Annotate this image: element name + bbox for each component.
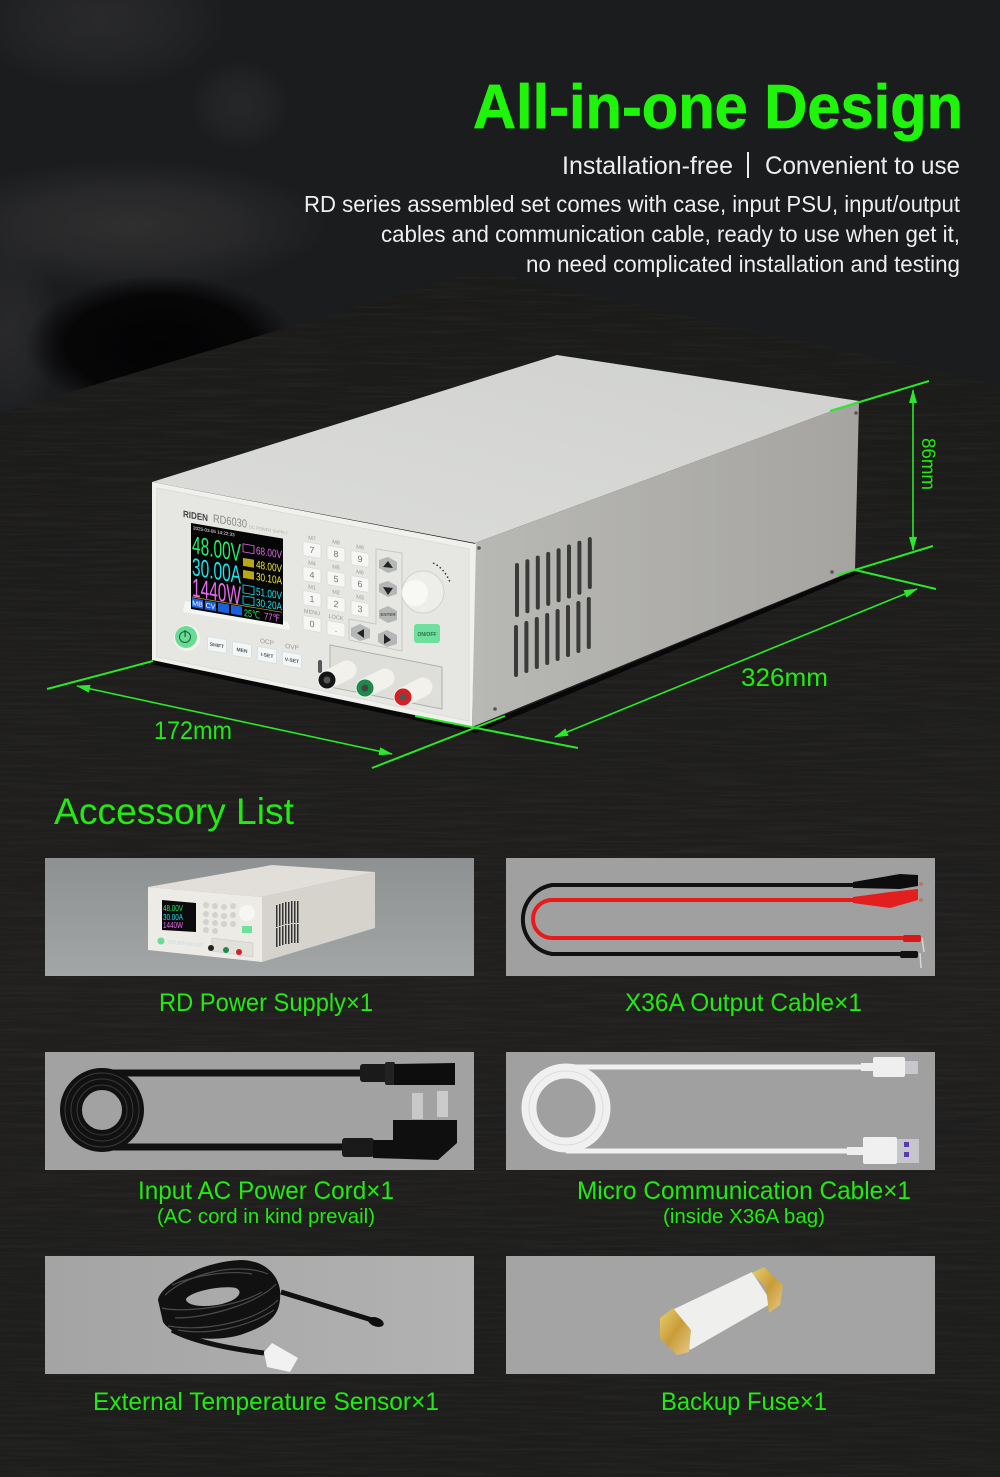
mini device (148, 865, 375, 962)
brand text (183, 508, 288, 538)
subtitle (562, 152, 960, 180)
keypad: 9 (357, 554, 363, 564)
LCD screen: 25℃ (244, 608, 260, 622)
on/off button: ON/OFF (418, 632, 436, 638)
white cable (529, 1067, 862, 1151)
brand text: RIDEN (183, 509, 208, 524)
keypad (303, 534, 369, 638)
function buttons (208, 636, 302, 669)
fuse caps (660, 1267, 783, 1355)
side screws (477, 411, 858, 711)
contact shadow (150, 570, 860, 733)
panel: external temperature sensor (45, 1256, 474, 1374)
fuse body (672, 1272, 772, 1350)
label: micro communication cable: Micro Communication Cable×1 (577, 1177, 911, 1205)
mini device: 1440W (163, 921, 183, 930)
description text (304, 191, 961, 277)
keypad: 4 (309, 570, 315, 580)
keypad: 8 (333, 549, 339, 559)
brand text: DC POWER SUPPLY (249, 524, 288, 536)
keypad: 3 (357, 604, 363, 614)
LCD screen: 2025-03-05 14:22:33 (193, 525, 235, 537)
LCD screen: 48.00V (256, 559, 282, 576)
label: external temperature sensor: External Temperature Sensor×1 (93, 1388, 439, 1416)
panel: micro communication cable (506, 1052, 935, 1170)
label: input AC power cord (138, 1177, 394, 1228)
white connector (264, 1343, 298, 1372)
USB-A connector (847, 1137, 919, 1164)
subtitle: Convenient to use (765, 152, 960, 180)
panel: X36A output cable (506, 858, 935, 976)
sensor probe tip (367, 1315, 385, 1329)
label: X36A output cable: X36A Output Cable×1 (625, 989, 862, 1017)
LCD screen: 30.20A (256, 597, 282, 614)
label: micro communication cable (577, 1177, 911, 1228)
output terminals (318, 645, 442, 709)
function buttons: OCP (260, 638, 275, 647)
keypad: 1 (309, 594, 315, 604)
product: RD6030 power supply (150, 355, 860, 733)
subtitle: Installation-free (562, 152, 733, 180)
dimension: 326mm depth (415, 570, 936, 748)
keypad: M2 (332, 589, 340, 597)
function buttons: I-SET (261, 652, 274, 660)
keypad: M6 (356, 569, 364, 577)
description text: cables and communication cable, ready to use when get it, (381, 221, 960, 247)
panel: backup fuse (506, 1256, 935, 1374)
label: input AC power cord: Input AC Power Cord×1 (138, 1177, 394, 1205)
dimension: 86mm height (830, 381, 938, 575)
panel: RD power supply (45, 858, 474, 976)
LCD screen: 48.00V (192, 531, 241, 567)
label: micro communication cable: (inside X36A bag) (663, 1205, 825, 1228)
function buttons: MEN (236, 647, 248, 655)
sensor cable coil (158, 1260, 280, 1339)
heading: accessory list: Accessory List (54, 791, 295, 832)
description text: no need complicated installation and testing (526, 251, 960, 277)
title: All-in-one Design (473, 73, 963, 142)
dimension: 172mm width: 172mm (154, 717, 232, 745)
side face (472, 401, 859, 727)
LCD screen: 77℉ (264, 611, 280, 625)
LCD screen: MB (192, 600, 203, 609)
panel: input AC power cord (45, 1052, 474, 1170)
keypad: 0 (309, 619, 315, 629)
function buttons: SHIFT (210, 642, 225, 650)
micro connector (861, 1057, 918, 1077)
label: backup fuse: Backup Fuse×1 (661, 1388, 827, 1416)
brand text: RD6030 (213, 513, 247, 531)
function buttons: OVP (285, 643, 299, 652)
keypad: M9 (356, 544, 364, 552)
mini device: 48.00V (163, 904, 184, 913)
front face (152, 482, 476, 727)
keypad: M8 (332, 539, 340, 547)
IEC connector (360, 1062, 455, 1085)
arrow key panel: ENTER (380, 612, 396, 617)
dimension: 86mm height: 86mm (917, 438, 938, 490)
function buttons: V-SET (285, 657, 300, 665)
LCD screen: 30.00A (192, 553, 241, 589)
keypad: . (335, 624, 337, 634)
mains plug (342, 1091, 457, 1160)
keypad: M5 (332, 564, 340, 572)
LCD screen: CV (206, 603, 216, 611)
black clip (853, 874, 923, 889)
keypad: 5 (333, 574, 339, 584)
LCD screen: 30.10A (256, 571, 282, 588)
keypad: 2 (333, 599, 339, 609)
keypad: M4 (308, 560, 316, 568)
label: input AC power cord: (AC cord in kind prevail) (157, 1205, 375, 1228)
keypad: M3 (356, 594, 364, 602)
dimension: 326mm depth: 326mm (741, 664, 828, 692)
LCD screen: 51.00V (256, 586, 282, 603)
on/off button (414, 624, 440, 643)
side vents (516, 539, 590, 675)
keypad: M7 (308, 535, 316, 543)
keypad: LOCK (329, 614, 344, 622)
arrow key panel (349, 549, 402, 651)
label: RD power supply: RD Power Supply×1 (159, 989, 373, 1017)
keypad: MENU (304, 609, 320, 617)
lower wire and probe (172, 1292, 372, 1353)
background: blurred room (0, 0, 1000, 430)
power button (174, 625, 200, 651)
LCD screen: 68.00V (256, 545, 282, 562)
LCD screen: 1440W (192, 572, 241, 610)
cord (65, 1073, 362, 1147)
keypad: 6 (357, 579, 363, 589)
keypad: M1 (308, 584, 316, 592)
description text: RD series assembled set comes with case, input PSU, input/output (304, 191, 961, 217)
top face (152, 355, 859, 543)
red clip (853, 889, 923, 908)
mini device: 30.00A (163, 913, 184, 922)
LCD screen (191, 523, 283, 626)
screen bezel (183, 601, 290, 630)
dimension: 172mm width (47, 661, 505, 768)
keypad: 7 (309, 545, 315, 555)
rotary knob (402, 563, 450, 613)
cables (523, 885, 905, 954)
wire tips (900, 935, 924, 968)
